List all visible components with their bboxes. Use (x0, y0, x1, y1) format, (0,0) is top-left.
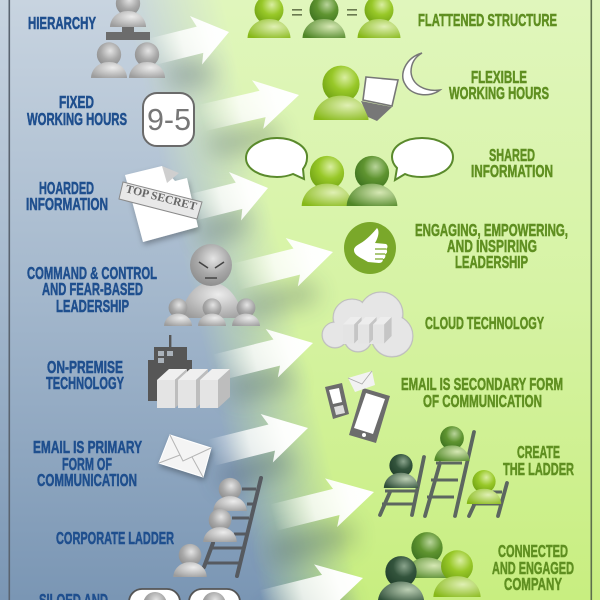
left column labels: old way: WORKING HOURS (27, 109, 127, 129)
left column labels: old way: HIERARCHY (28, 13, 96, 33)
left column labels: old way: CORPORATE LADDER (56, 528, 174, 548)
icon: person with laptop and moon (313, 53, 440, 121)
arrows: transition from old to new (145, 8, 380, 600)
left column labels: old way: ON-PREMISE (47, 357, 123, 377)
left column labels: old way: COMMAND & CONTROL (27, 263, 157, 283)
icon: envelope (159, 435, 211, 477)
icon: create the ladder (380, 426, 507, 516)
icon: 9-5 clock box (143, 93, 194, 146)
icon: angry boss over team (164, 244, 260, 326)
right column labels: new way: AND INSPIRING (447, 236, 537, 256)
left column labels: old way: FORM OF (62, 454, 112, 474)
left column labels: old way: TECHNOLOGY (46, 373, 124, 393)
right column labels: new way: FLEXIBLE (471, 67, 527, 87)
left column labels: old way: LEADERSHIP (56, 296, 129, 316)
right column labels: new way (401, 10, 574, 594)
left column labels: old way: COMMUNICATION (37, 470, 137, 490)
icon: 9-5 clock box: 9-5 (147, 102, 191, 137)
icon: shared information people with speech bubbles (246, 138, 453, 206)
left column labels: old way (26, 13, 174, 600)
left column labels: old way: FIXED (59, 92, 94, 112)
icon: thumbs up badge (344, 222, 396, 274)
icon: siloed people boxes (129, 589, 240, 600)
left column labels: old way: EMAIL IS PRIMARY (33, 437, 142, 457)
icon: flattened structure equal people (248, 0, 400, 38)
icon: connected and engaged people (378, 532, 481, 600)
icon: top secret document (119, 166, 202, 242)
icon: cloud with servers (322, 292, 413, 357)
left column labels: old way: AND FEAR-BASED (42, 279, 143, 299)
right column labels: new way: INFORMATION (471, 161, 553, 181)
icon: corporate ladder (173, 478, 261, 577)
right column labels: new way: CREATE (517, 442, 560, 462)
icon: hierarchy org chart (91, 0, 165, 78)
right column labels: new way: COMPANY (504, 574, 562, 594)
right column labels: new way: WORKING HOURS (449, 83, 549, 103)
right column labels: new way: SHARED (489, 145, 535, 165)
left column labels: old way: HOARDED (39, 178, 94, 198)
right column labels: new way: LEADERSHIP (455, 252, 528, 272)
right column labels: new way: OF COMMUNICATION (423, 391, 542, 411)
icon: building with servers (148, 335, 230, 408)
icon: phones with email (325, 371, 390, 443)
icon: top secret document: TOP SECRET (124, 183, 198, 213)
left column labels: old way: INFORMATION (26, 194, 108, 214)
